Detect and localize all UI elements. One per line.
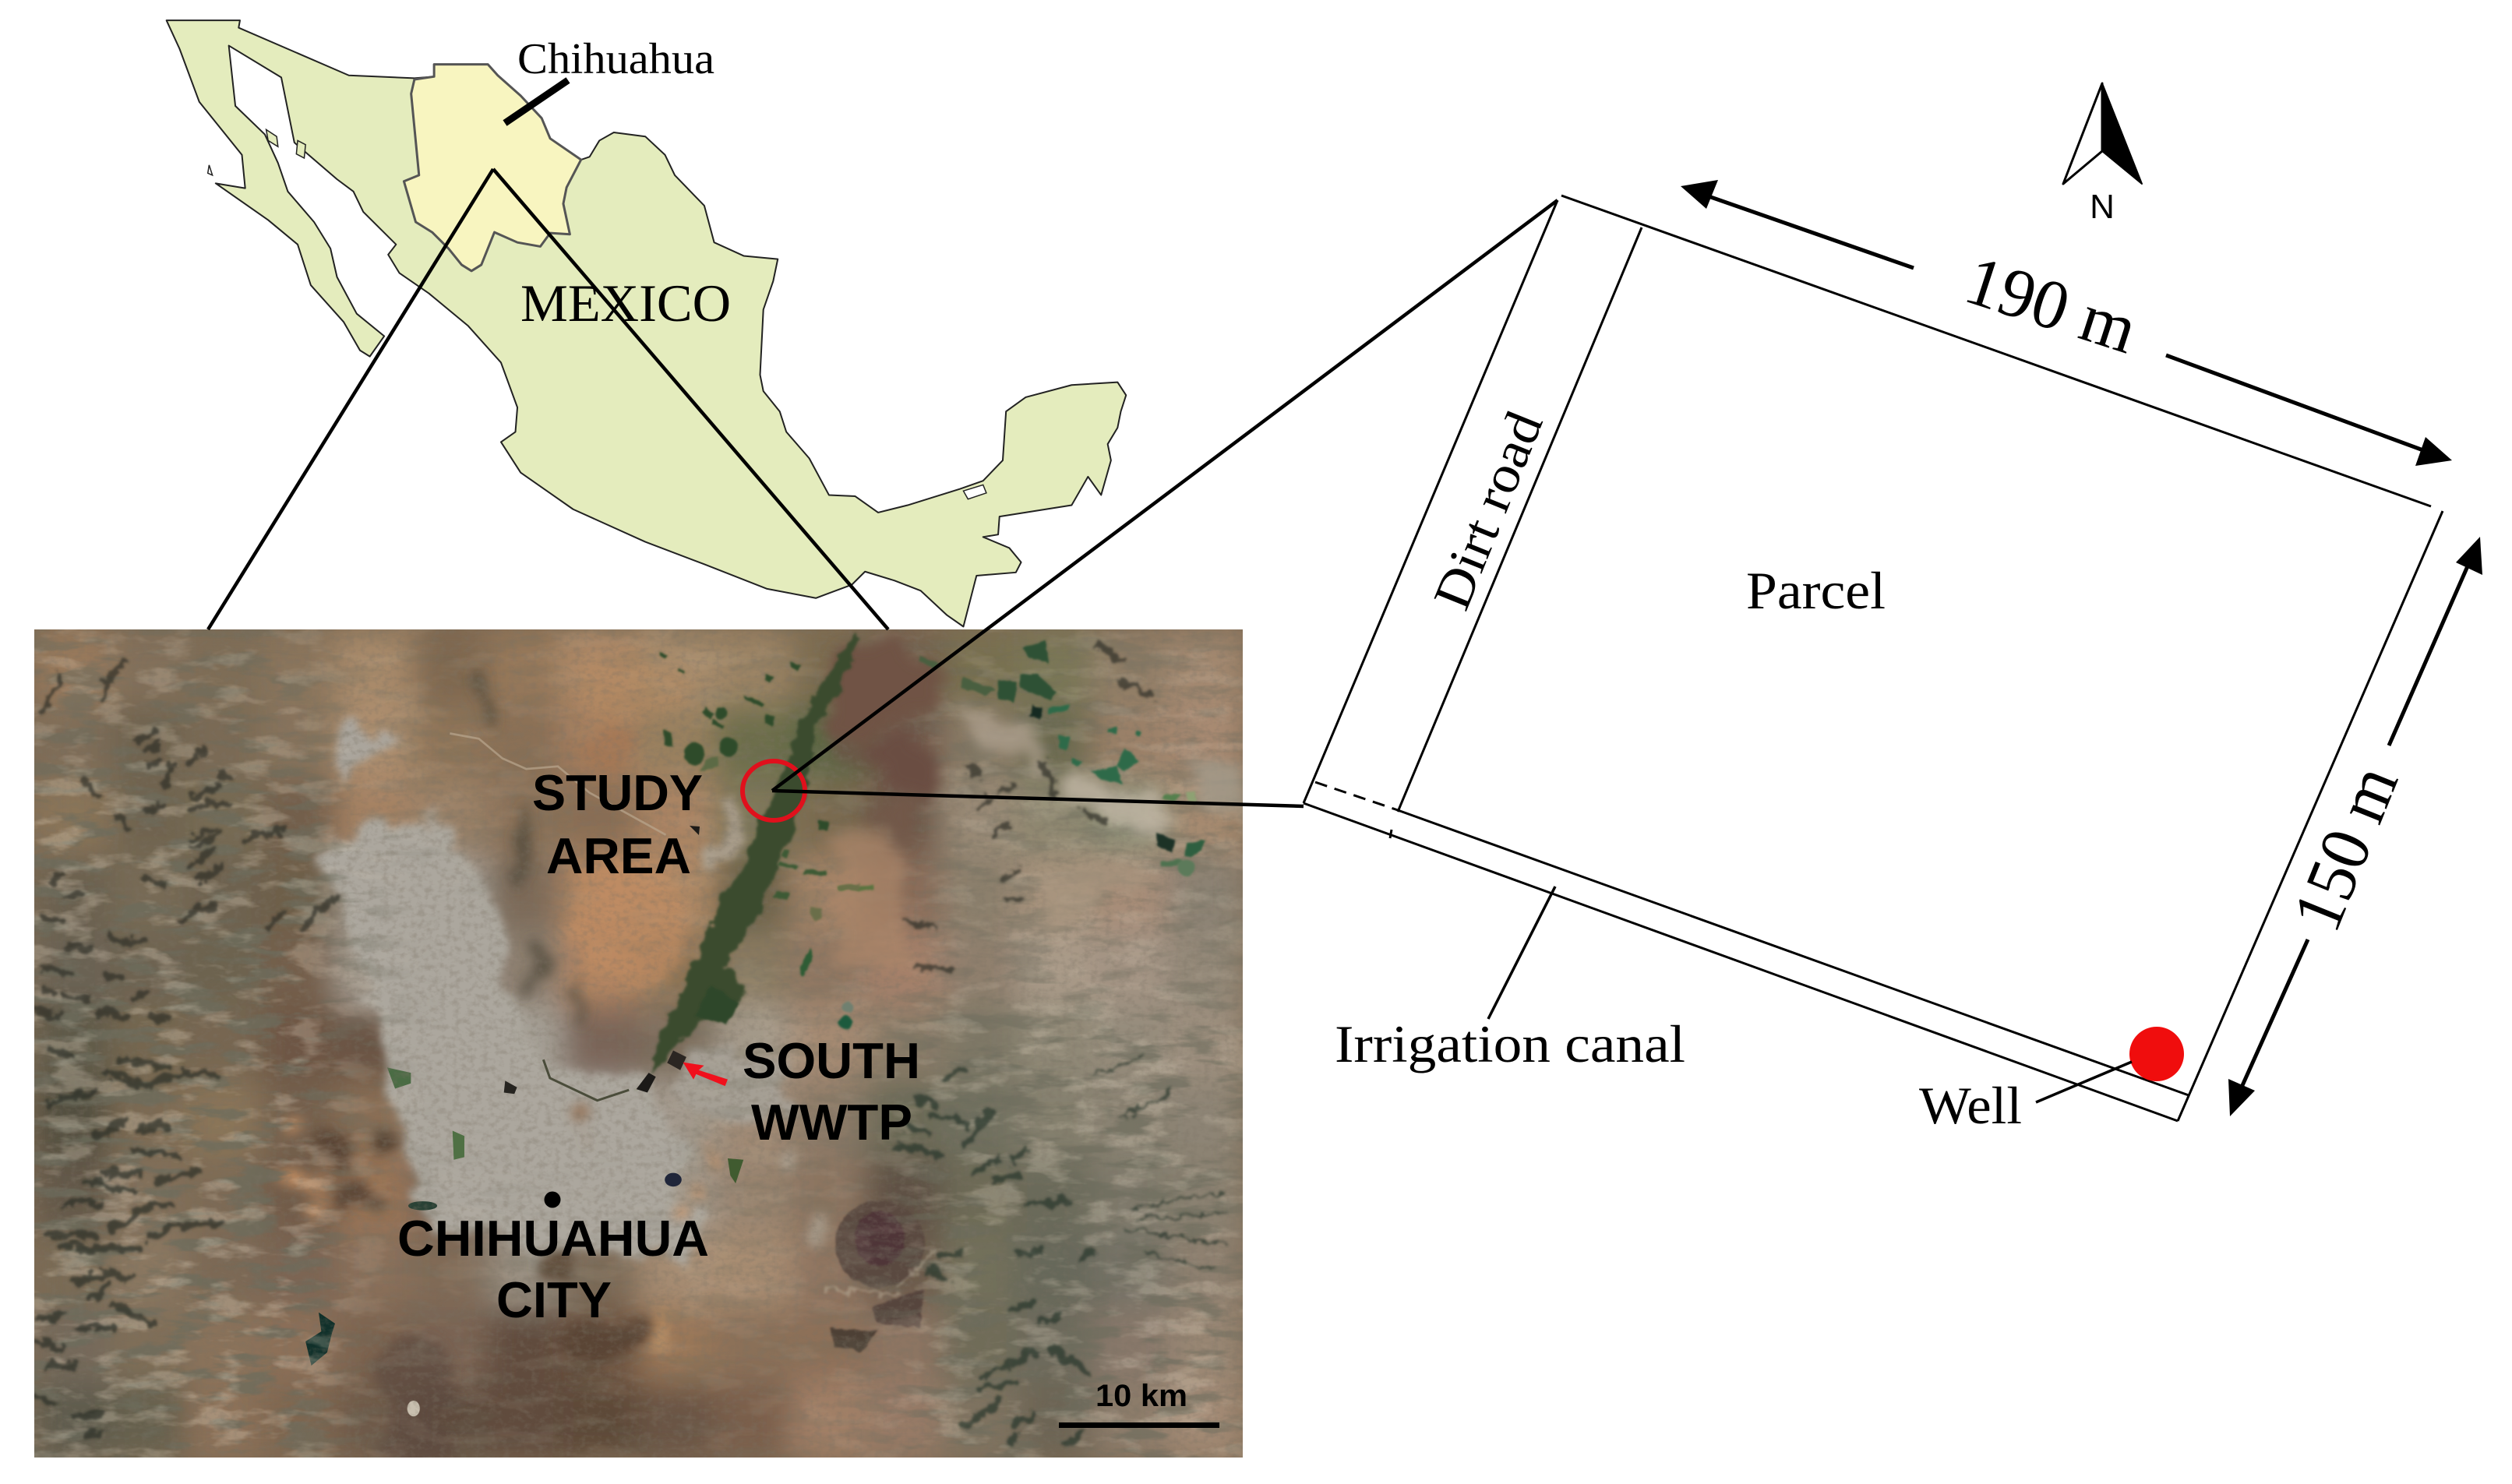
label: CHIHUAHUA CITY bbox=[397, 1210, 709, 1328]
agricultural valley corridor bbox=[635, 633, 861, 1091]
label: STUDY AREA: STUDY bbox=[532, 764, 703, 821]
irrigated fields (north-east) bbox=[838, 640, 1205, 890]
small dark features bbox=[453, 1059, 743, 1186]
parcel outline bbox=[1304, 196, 2443, 1121]
label: Well: Well bbox=[1919, 1076, 2022, 1135]
north arrow: N bbox=[2090, 188, 2115, 226]
red arrow to South WWTP bbox=[683, 1063, 728, 1086]
label: CHIHUAHUA CITY: CITY bbox=[496, 1271, 612, 1328]
terrain texture bbox=[34, 629, 1243, 1458]
black triangle feature bbox=[690, 826, 700, 835]
orange desert and dark hills bbox=[476, 653, 860, 1024]
irrigation canal leader bbox=[1488, 887, 1555, 1019]
scale bar 10 km: 10 km bbox=[1095, 1379, 1187, 1413]
label: SOUTH WWTP: SOUTH bbox=[743, 1032, 920, 1089]
Chihuahua city dot bbox=[544, 1192, 561, 1207]
Chihuahua leader line bbox=[505, 80, 568, 123]
dimension 150 m bbox=[2228, 537, 2482, 1116]
label: Dirt road: Dirt road bbox=[1421, 404, 1554, 618]
dimension 150 m: 150 m bbox=[2278, 755, 2413, 941]
irrigated fields (study area) bbox=[659, 652, 860, 1030]
study area red circle bbox=[743, 761, 805, 820]
north arrow bbox=[2063, 83, 2142, 226]
zoom lines from Chihuahua to satellite image bbox=[208, 169, 888, 629]
dimension 190 m: 190 m bbox=[1956, 241, 2146, 368]
lower-left brown hills and lake bbox=[279, 1067, 447, 1457]
label: STUDY AREA bbox=[532, 764, 703, 884]
Mexico country shape bbox=[167, 20, 1126, 626]
Chihuahua state highlight bbox=[404, 65, 581, 271]
label: MEXICO: MEXICO bbox=[520, 273, 731, 333]
map: Mexico bbox=[167, 20, 1126, 626]
zoom lines from study area to parcel bbox=[772, 200, 1558, 806]
label: SOUTH WWTP bbox=[743, 1032, 920, 1151]
south-western mountain ridges bbox=[37, 1052, 221, 1436]
well red dot bbox=[2129, 1027, 2184, 1081]
satellite image panel bbox=[34, 629, 1245, 1460]
label: Chihuahua: Chihuahua bbox=[517, 35, 714, 83]
city urban area bbox=[315, 726, 779, 1262]
western mountain ridges bbox=[40, 664, 337, 1019]
dimension 190 m bbox=[1681, 180, 2452, 466]
label: STUDY AREA: AREA bbox=[546, 827, 691, 884]
south dark hills bbox=[539, 1102, 831, 1370]
eastern mountain ridges bbox=[830, 1055, 1225, 1444]
road trace bbox=[450, 734, 666, 835]
label: CHIHUAHUA CITY: CHIHUAHUA bbox=[397, 1210, 709, 1267]
scale bar 10 km bbox=[1059, 1379, 1219, 1428]
label: Irrigation canal: Irrigation canal bbox=[1335, 1014, 1685, 1073]
label: Parcel: Parcel bbox=[1746, 561, 1886, 620]
satellite colour mosaic bbox=[34, 629, 1245, 1460]
volcanic dome and brown hills bbox=[830, 1200, 925, 1352]
WWTP marker squares bbox=[637, 1050, 686, 1093]
north-eastern terrain bbox=[830, 645, 1240, 971]
label: SOUTH WWTP: WWTP bbox=[751, 1094, 912, 1151]
parcel diagram bbox=[1304, 83, 2482, 1135]
well leader bbox=[2036, 1062, 2132, 1102]
